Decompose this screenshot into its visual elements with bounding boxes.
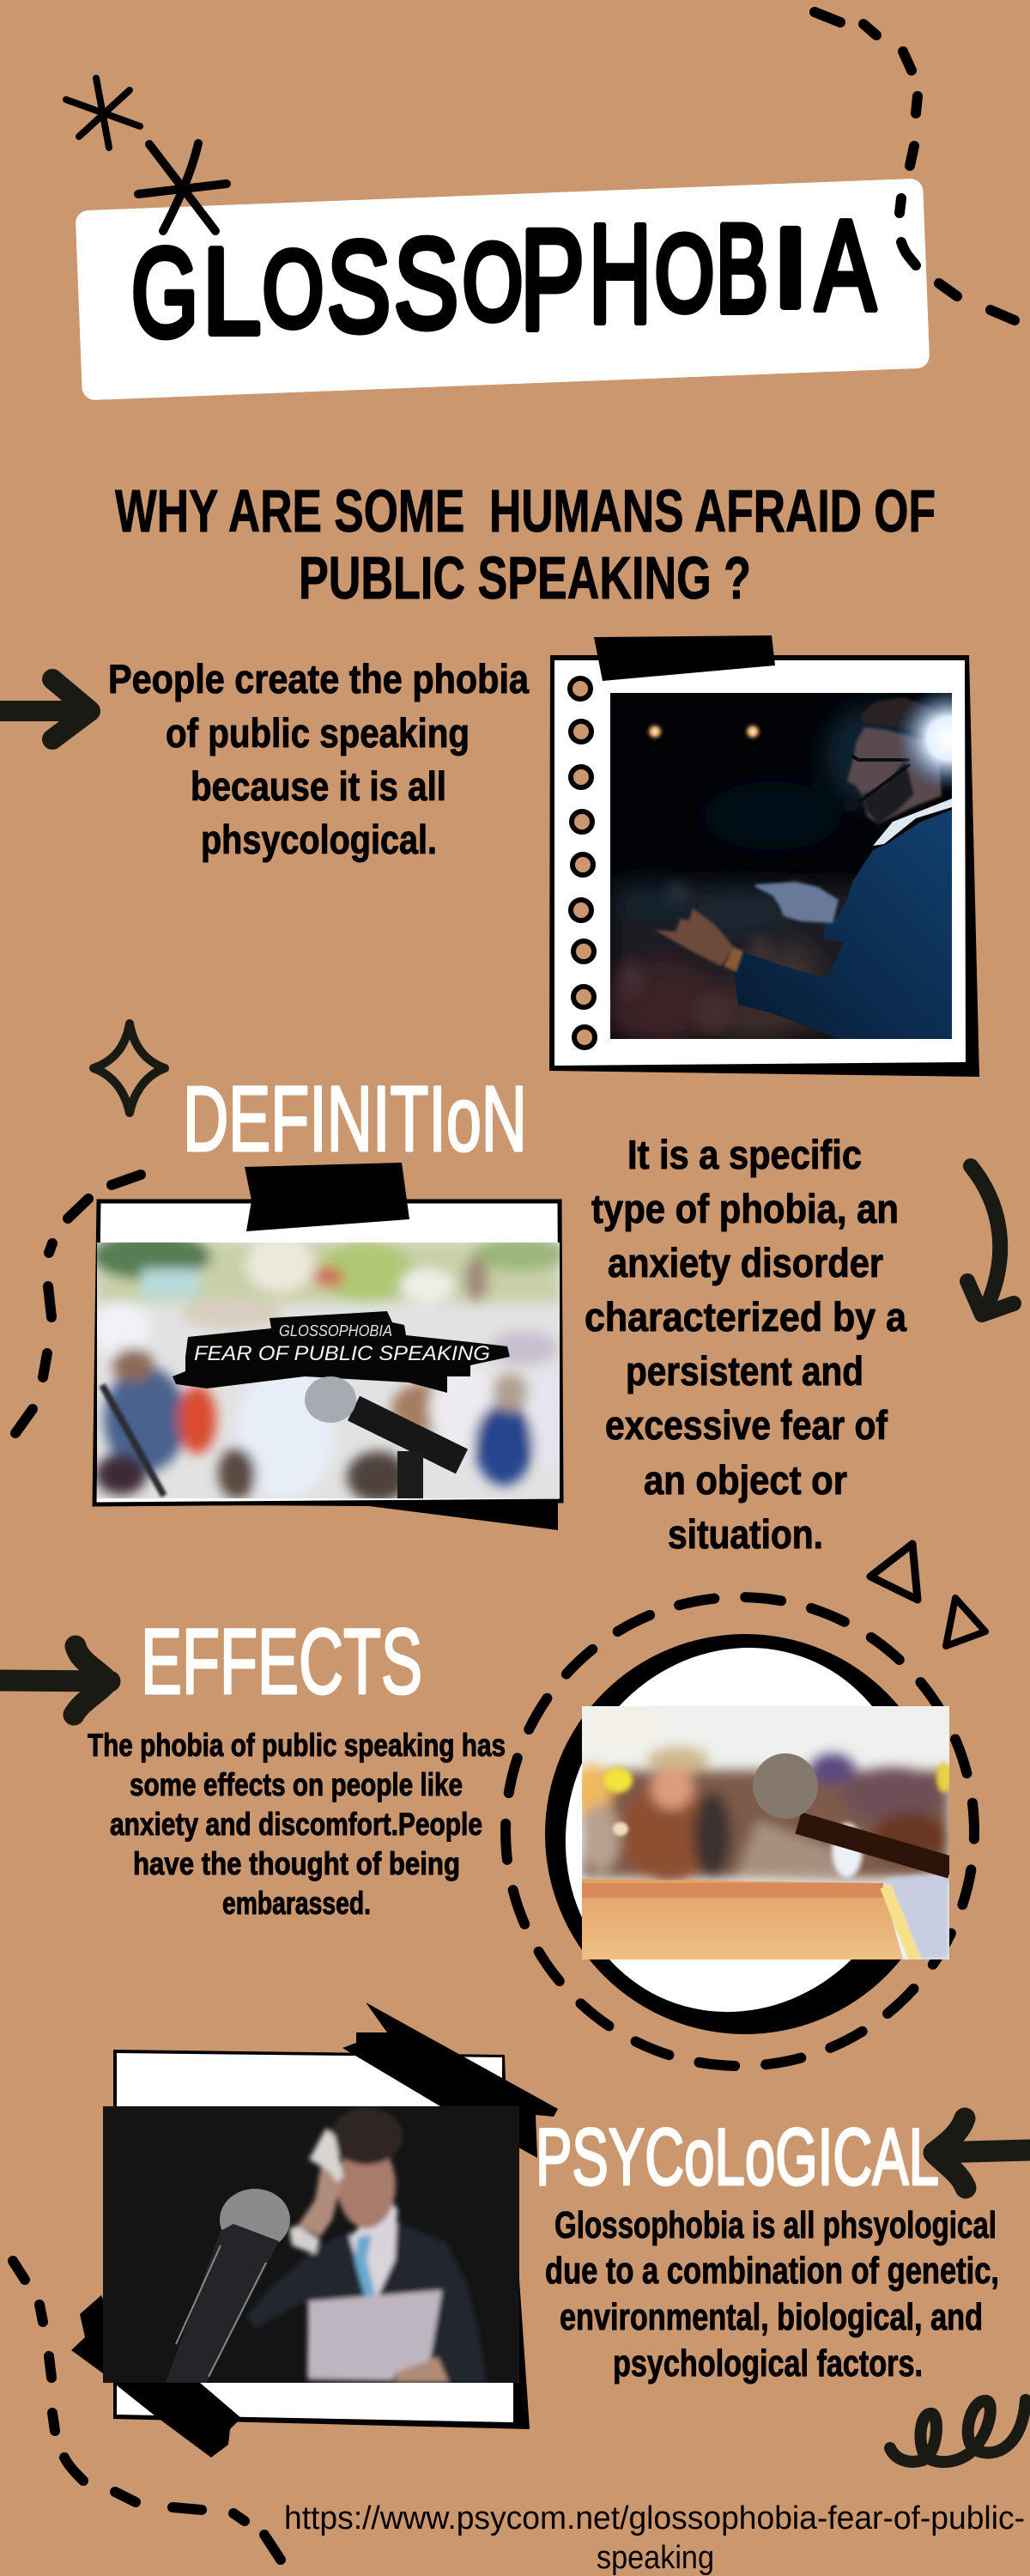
arrow: right to effects <box>0 1646 110 1715</box>
text: definition: situation. <box>668 1511 823 1557</box>
dashed ring <box>479 1571 1001 2093</box>
title card <box>76 179 930 400</box>
photo: crowd and microphone <box>97 1242 560 1498</box>
text: definition: persistent and <box>626 1348 863 1394</box>
title: O <box>463 222 523 343</box>
text: effects: embarassed. <box>222 1886 371 1921</box>
source link text: https://www.psycom.net/glossophobia-fear-of-public- <box>284 2500 1025 2537</box>
title: L <box>203 223 261 360</box>
text: effects: have the thought of being <box>133 1846 460 1881</box>
title: A <box>815 195 876 337</box>
text: effects: anxiety and discomfort.People <box>110 1807 482 1842</box>
tape bottom <box>71 2295 241 2458</box>
text: intro: People create the phobia <box>108 656 530 702</box>
decorative asterisk small <box>66 78 140 148</box>
text: effects <box>88 1728 506 1921</box>
source link text: speaking <box>597 2540 714 2576</box>
source link text <box>284 2500 1025 2576</box>
subheading <box>115 477 936 611</box>
icon: triangle large <box>870 1544 918 1600</box>
heading: effects: EFFECTS <box>141 1609 422 1713</box>
text: definition: It is a specific <box>627 1132 862 1177</box>
text: definition: anxiety disorder <box>608 1240 883 1285</box>
tape top <box>342 2002 558 2158</box>
arrow: curved down <box>967 1166 1014 1315</box>
panel: microphone photo note <box>91 1163 568 1530</box>
suit <box>734 810 952 1039</box>
text: intro: phsycological. <box>201 817 437 862</box>
text: definition: an object or <box>644 1457 847 1503</box>
brush label text <box>194 1322 490 1365</box>
icon: triangle small <box>946 1598 985 1646</box>
icon: squiggle <box>890 2400 1026 2462</box>
title: O <box>655 213 714 334</box>
text: intro: of public speaking <box>166 710 470 756</box>
dashed curve bottom left <box>13 2261 281 2560</box>
text: psychological <box>545 2204 999 2385</box>
title: S <box>394 213 458 355</box>
panel: speaker photo note <box>549 635 1002 1077</box>
panel: stressed speaker note <box>71 2002 558 2458</box>
text: effects: The phobia of public speaking has <box>88 1728 506 1763</box>
photo: speaker on stage <box>610 693 952 1039</box>
title: O <box>263 230 324 349</box>
text: intro: because it is all <box>191 763 446 809</box>
heading: definition: DEFINITIoN <box>183 1066 527 1170</box>
text: psychological: psychological factors. <box>613 2342 923 2385</box>
dashed curve top right <box>815 12 1015 320</box>
brush label text: GLOSSOPHOBIA <box>279 1322 392 1340</box>
title: H <box>589 195 651 352</box>
title: G <box>131 222 198 362</box>
dashed curve left <box>15 1175 141 1433</box>
text: definition: excessive fear of <box>605 1402 888 1448</box>
arrow: left to psychological <box>934 2118 1030 2188</box>
photo: nervous man with microphone <box>103 2106 519 2383</box>
title: I <box>772 204 809 331</box>
title: P <box>520 201 585 360</box>
brush label text: FEAR OF PUBLIC SPEAKING <box>194 1342 490 1365</box>
panel: circle photo <box>479 1571 1001 2093</box>
tape <box>245 1163 409 1231</box>
title: S <box>327 215 391 358</box>
subheading: PUBLIC SPEAKING ? <box>299 544 751 611</box>
tape <box>594 635 775 681</box>
notebook holes <box>570 678 595 1048</box>
text: definition: characterized by a <box>585 1294 907 1340</box>
text: definition <box>585 1132 907 1557</box>
text: intro <box>108 656 530 862</box>
arrow: right to intro <box>0 679 90 739</box>
text: definition: type of phobia, an <box>591 1186 899 1231</box>
text: effects: some effects on people like <box>130 1767 463 1802</box>
decorative asterisk large <box>138 143 227 231</box>
photo: lectern microphone <box>582 1706 949 1959</box>
title: B <box>716 198 768 338</box>
icon: sparkle <box>94 1024 165 1113</box>
